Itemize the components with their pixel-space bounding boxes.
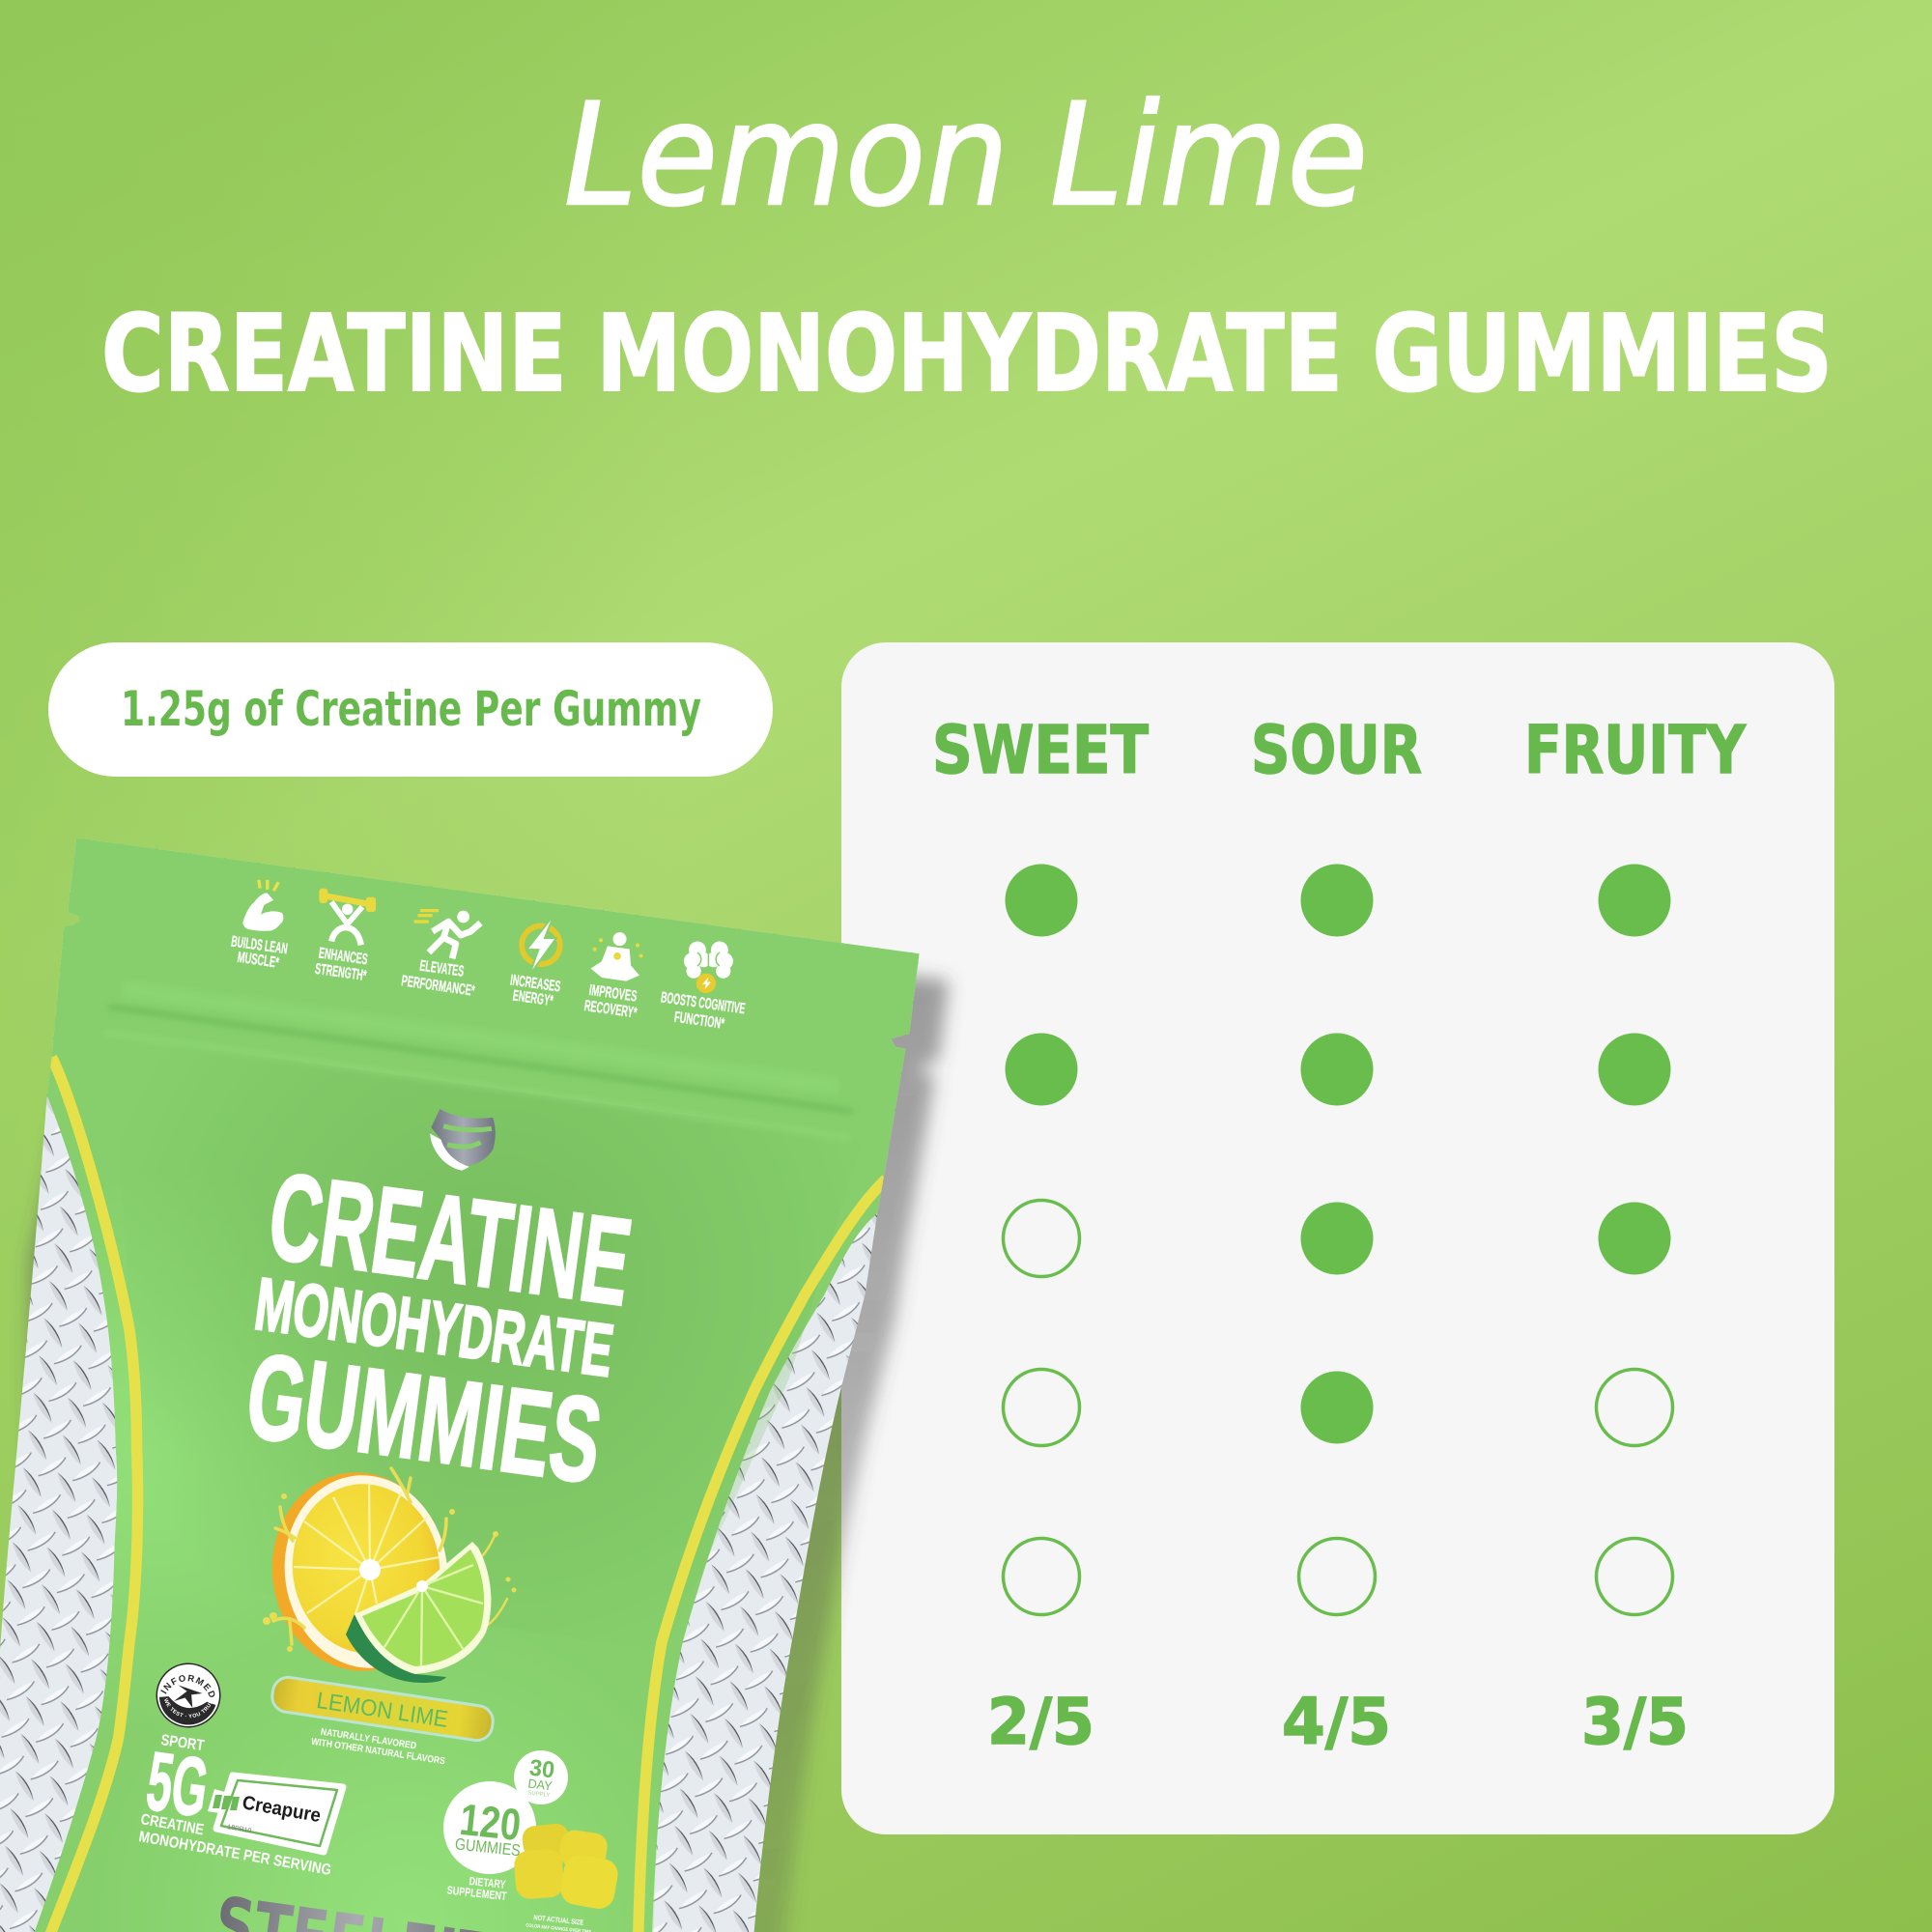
label: boosts cognitive function: [660, 989, 746, 1033]
30 day supply badge: [511, 1747, 571, 1807]
pill callout: creatine per gummy: [48, 642, 773, 777]
label: elevates performance: ELEVATES: [418, 958, 465, 980]
label: enhances strength: ENHANCES: [318, 945, 369, 968]
pouch product title: CREATINE: [261, 1148, 639, 1332]
icon: weightlifter: [319, 889, 376, 945]
product pouch: [0, 838, 958, 1932]
5g dose: 5G: [141, 1735, 213, 1834]
pouch silhouette with diamond plate: [0, 813, 949, 1932]
natural flavor note: WITH OTHER NATURAL FLAVORS: [310, 1737, 446, 1767]
score: sweet 2/5: 2/5: [987, 1685, 1094, 1759]
creapure badge: Creapure: [241, 1792, 323, 1827]
green pouch face: [30, 826, 949, 1932]
creapure badge: 18PR10: [227, 1824, 252, 1834]
label: builds lean muscle: BUILDS LEAN: [230, 933, 289, 957]
creatine per serving text: MONOHYDRATE PER SERVING: [137, 1829, 332, 1879]
icon: muscle: [242, 880, 283, 931]
label: elevates performance: [400, 958, 476, 1000]
pouch shading: [96, 1256, 270, 1634]
120 gummies badge: GUMMIES: [454, 1834, 522, 1860]
icon: brain: [684, 941, 733, 993]
not actual size note: NOT ACTUAL SIZE: [533, 1913, 584, 1927]
lemon slice illustration: [260, 1461, 460, 1683]
flavor label pill on pouch: LEMON LIME: [315, 1688, 450, 1733]
pouch product title: [240, 1148, 639, 1509]
dietary supplement label: SUPPLEMENT: [446, 1884, 508, 1903]
pill callout: creatine per gummy: 1.25g of Creatine Per Gummy: [121, 681, 701, 737]
label: enhances strength: [314, 945, 369, 984]
rating dots: sour: [1298, 864, 1376, 1615]
label: boosts cognitive function: FUNCTION*: [673, 1009, 725, 1033]
pouch drop shadow: [30, 865, 949, 1932]
creapure badge: [208, 1776, 343, 1852]
icon: runner: [414, 911, 480, 958]
pouch product title: MONOHYDRATE: [250, 1264, 618, 1393]
creatine per serving text: [137, 1811, 332, 1879]
score: sour 4/5: 4/5: [1282, 1685, 1391, 1759]
rating dots: sweet: [1003, 864, 1080, 1615]
30 day supply badge: 30: [527, 1755, 556, 1784]
label: improves recovery: RECOVERY*: [583, 998, 639, 1022]
icon: meditation figure: [589, 929, 646, 982]
flavor label pill on pouch: [270, 1675, 495, 1743]
120 gummies badge: 120: [458, 1794, 524, 1850]
label: increases energy: ENERGY*: [512, 987, 554, 1009]
natural flavor note: NATURALLY FLAVORED: [320, 1727, 417, 1751]
informed sport badge: INFORMED: [160, 1675, 214, 1697]
informed sport badge: WE TEST · YOU TRUST: [164, 1698, 213, 1718]
informed sport badge: [156, 1663, 220, 1727]
label: improves recovery: [583, 982, 639, 1022]
yellow stripes: [49, 1057, 886, 1932]
juice splash droplets: [263, 1468, 516, 1651]
panel: flavor rating table: [841, 642, 1834, 1834]
label: enhances strength: STRENGTH*: [314, 961, 368, 984]
label: builds lean muscle: [230, 933, 289, 972]
zipper seal lines: [110, 1005, 850, 1113]
artwork in native pixel coordinates: [137, 1466, 618, 1932]
icon: energy bolt: [522, 921, 560, 970]
score: fruity 3/5: 3/5: [1581, 1685, 1689, 1759]
heading: sweet: SWEET: [932, 712, 1149, 789]
brand shield logo: [430, 1109, 496, 1171]
label: elevates performance: PERFORMANCE*: [400, 973, 476, 1000]
pouch product title: GUMMIES: [240, 1328, 609, 1509]
yellow gummies: [513, 1823, 620, 1911]
label: increases energy: INCREASES: [509, 972, 561, 996]
natural flavor note: [310, 1727, 446, 1767]
label: boosts cognitive function: BOOSTS COGNITIVE: [660, 989, 746, 1017]
dietary supplement label: [446, 1874, 508, 1903]
sport label: SPORT: [159, 1732, 206, 1754]
benefit icons row: [230, 880, 746, 1033]
not actual size note: [526, 1913, 592, 1932]
rating dots: fruity: [1596, 864, 1673, 1615]
heading: fruity: FRUITY: [1524, 712, 1747, 789]
lime wedge illustration: [346, 1542, 491, 1683]
label: builds lean muscle: MUSCLE*: [237, 950, 280, 972]
title: Lemon Lime: Lemon Lime: [564, 73, 1368, 238]
120 gummies badge: [439, 1776, 541, 1879]
dietary supplement label: DIETARY: [469, 1874, 506, 1891]
creatine per serving text: CREATINE: [139, 1811, 206, 1838]
30 day supply badge: DAY: [527, 1776, 554, 1793]
label: increases energy: [509, 972, 561, 1009]
30 day supply badge: SUPPLY: [527, 1790, 551, 1799]
heading: sour: SOUR: [1251, 712, 1422, 789]
label: improves recovery: IMPROVES: [588, 982, 638, 1006]
